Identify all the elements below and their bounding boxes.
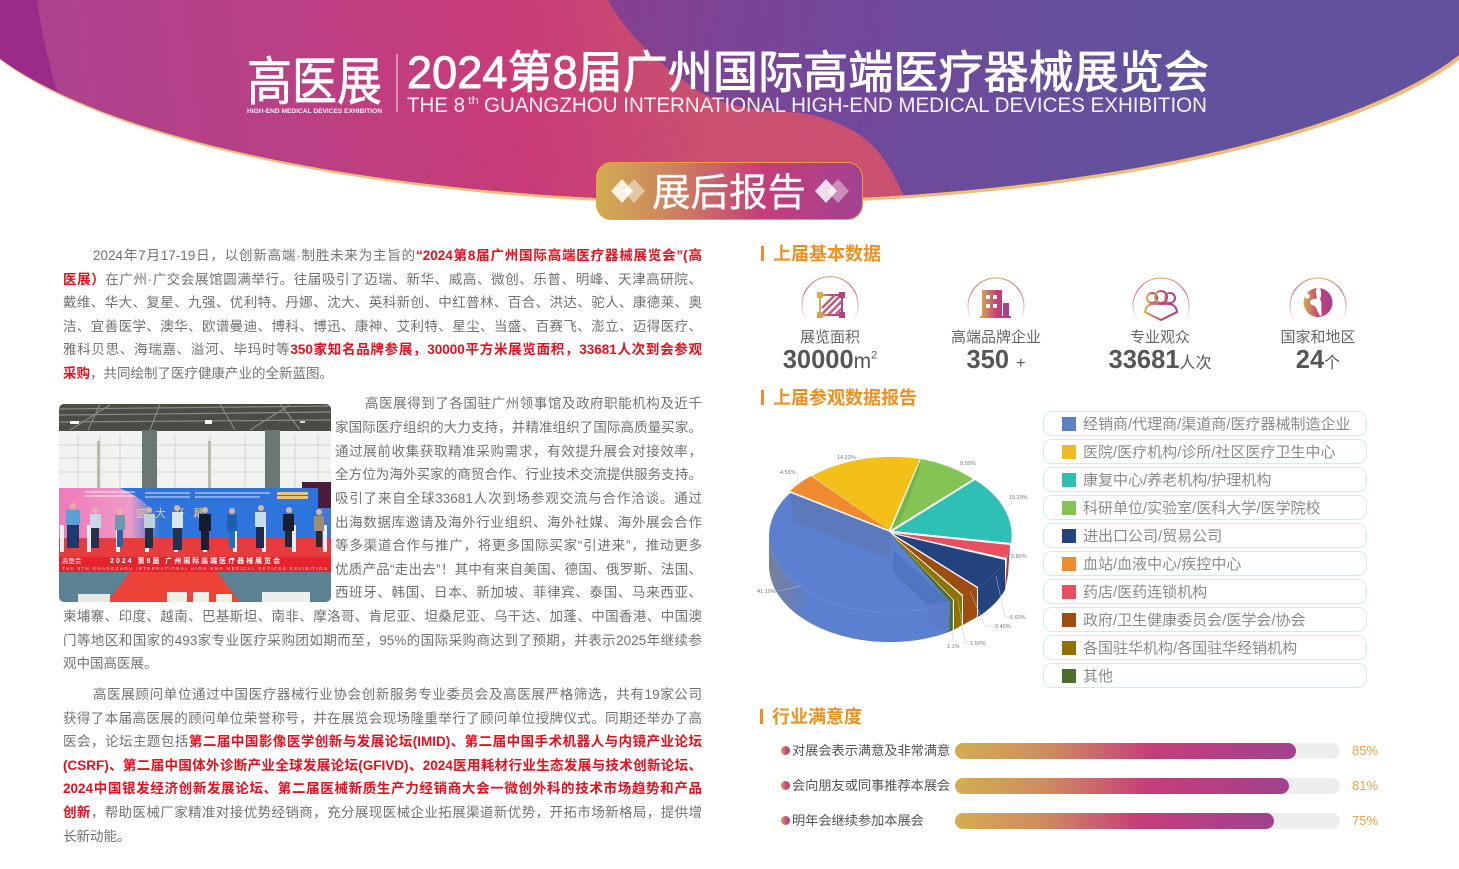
legend item: others: [1043, 663, 1367, 688]
data labels: [757, 455, 1028, 650]
legend item: rehab: [1043, 467, 1367, 492]
header banner: [0, 0, 1459, 220]
legend item: blood stations: [1043, 551, 1367, 576]
title: 2024第8届广州国际高端医疗器械展览会: [407, 47, 1209, 98]
legend item: rehab: 康复中心/养老机构/护理机构: [1083, 472, 1271, 489]
stat: exhibition area: 展览面积: [800, 329, 860, 346]
legend item: pharmacies: [1043, 579, 1367, 604]
legend item: trading: 进出口公司/贸易公司: [1083, 528, 1222, 545]
exhibition support paragraph: [63, 396, 702, 671]
stat: audience: [1109, 329, 1211, 374]
exhibition support paragraph: 通过展前收集获取精准采购需求，有效提升展会对接效率，: [335, 444, 702, 459]
forum paragraph: 医会，论坛主题包括第二届中国影像医学创新与发展论坛(IMID)、第二届中国手术机器人与内镜产业论坛: [63, 734, 702, 749]
data labels: 14.23%: [837, 455, 856, 461]
logo: HIGH-END MEDICAL DEVICES EXHIBITION: [247, 108, 383, 115]
forum paragraph: 长新动能。: [63, 829, 130, 844]
legend item: distributors: 经销商/代理商/渠道商/医疗器械制造企业: [1083, 416, 1351, 433]
exhibition support paragraph: 全方位为海外买家的商贸合作、行业技术交流提供服务支持。: [335, 467, 702, 482]
photo: opening ceremony: THE 8TH GUANGZHOU INTERNATIONAL HIGH-END MEDICAL DEVICES EXHIBITION: [62, 566, 327, 571]
stat: audience: 专业观众: [1130, 329, 1190, 346]
bar: recommend: 81%: [1352, 778, 1378, 793]
icon: brand enterprises: [968, 278, 1024, 322]
stat: brand enterprises: 350 +: [966, 346, 1025, 374]
legend item: hospitals: 医院/医疗机构/诊所/社区医疗卫生中心: [1083, 444, 1336, 461]
exhibition support paragraph: 高医展得到了各国驻广州领事馆及政府职能机构及近千: [365, 396, 702, 411]
english subtitle: THE 8: [407, 94, 465, 117]
data labels: 2.40%: [995, 624, 1011, 630]
photo: opening ceremony: 高医会: [62, 556, 82, 565]
data labels: 1.1%: [947, 644, 960, 650]
intro paragraph: 采购，共同绘制了医疗健康产业的全新蓝图。: [63, 366, 333, 381]
stat: countries: 24个: [1296, 346, 1340, 374]
intro paragraph: 洁、宜善医学、澳华、欧谱曼迪、博科、博迅、康神、艾利特、星尘、当盛、百赛飞、澎立、迈得医疗、: [63, 319, 702, 334]
olive slice: [891, 535, 962, 600]
english subtitle: GUANGZHOU INTERNATIONAL HIGH-END MEDICAL DEVICES EXHIBITION: [484, 94, 1207, 117]
bar: return next year: [781, 813, 1378, 829]
photo: opening ceremony: 盛大开幕: [136, 506, 212, 520]
intro paragraph: 医展）在广州·广交会展馆圆满举行。往届吸引了迈瑞、新华、威高、微创、乐普、明峰、天津高研院、: [63, 272, 702, 287]
intro paragraph: [63, 248, 702, 381]
bar: satisfied: 对展会表示满意及非常满意: [792, 743, 950, 758]
logo: 高医展: [247, 54, 382, 112]
green slice: [891, 459, 973, 530]
icon: exhibition area: [802, 277, 858, 322]
orange slice: [790, 476, 889, 530]
icon: professional audience: [1133, 278, 1189, 322]
legend item: hospitals: [1043, 439, 1367, 464]
photo: opening ceremony: [59, 404, 331, 602]
side walls: [769, 537, 950, 642]
gold rim of the header: [0, 0, 1459, 204]
teal slice: [893, 480, 1012, 543]
3D pie chart: [757, 455, 1028, 650]
data labels: 6.60%: [1010, 615, 1026, 621]
intro paragraph: 雅科贝思、海瑞嘉、溢河、毕玛时等350家知名品牌参展，30000平方米展览面积，33681人次到会参观: [63, 342, 702, 357]
report badge: 展后报告: [652, 172, 806, 215]
bar: recommend: [781, 778, 1378, 794]
legend item: trading: [1043, 523, 1367, 548]
forum paragraph: (CSRF)、第二届中国体外诊断产业全球发展论坛(GFIVD)、2024医用耗材行业生态发展与技术创新论坛、: [63, 758, 702, 773]
report badge: [596, 162, 862, 220]
exhibition support paragraph: 西班牙、韩国、日本、新加坡、菲律宾、泰国、马来西亚、: [335, 585, 702, 600]
bar: satisfied: [781, 743, 1378, 759]
exhibition support paragraph: 家国际医疗组织的大力支持，并精准组织了国际高质量买家。: [335, 420, 702, 435]
legend item: research: [1043, 495, 1367, 520]
forum paragraph: 获得了本届高医展的顾问单位荣誉称号，并在展览会现场隆重举行了顾问单位授牌仪式。同期还举办了高: [63, 711, 702, 726]
legend: [1043, 411, 1367, 688]
forum paragraph: 高医展顾问单位通过中国医疗器械行业协会创新服务专业委员会及高医展严格筛选，共有19家公司: [93, 687, 702, 702]
stat: exhibition area: 30000m2: [783, 346, 877, 374]
stat: brand enterprises: 高端品牌企业: [951, 329, 1041, 346]
intro paragraph: 2024年7月17-19日，以创新高端·制胜未来为主旨的“2024第8届广州国际高端医疗器械展览会”(高: [93, 248, 702, 263]
red slice: [893, 533, 1010, 558]
data labels: 1.50%: [970, 641, 986, 647]
heading: visitor data report: 上届参观数据报告: [773, 388, 917, 408]
data labels: 8.50%: [960, 461, 976, 467]
yellow slice: [812, 457, 920, 530]
stat: countries: [1280, 329, 1356, 374]
stat icons: [802, 276, 1346, 322]
exhibition support paragraph: 出海数据库邀请及海外行业组织、海外社媒、海外展会合作: [335, 515, 702, 530]
forum paragraph: 2024中国银发经济创新发展论坛、第二届医械新质生产力经销商大会一微创外科的技术市场趋势和产品: [63, 781, 702, 796]
blue slice: [769, 493, 950, 612]
stat: brand enterprises: [951, 329, 1041, 374]
exhibition support paragraph: 优质产品“走出去”！其中有来自美国、德国、俄罗斯、法国、: [335, 562, 702, 577]
photo: opening ceremony: 2024 第8届 广州国际高端医疗器械展览会: [110, 556, 280, 565]
bar: recommend: 会向朋友或同事推荐本展会: [792, 778, 950, 793]
stat: audience: 33681人次: [1109, 346, 1211, 374]
legend item: government: 政府/卫生健康委员会/医学会/协会: [1083, 612, 1306, 629]
heading: basic data: 上届基本数据: [773, 244, 881, 264]
data labels: 2.80%: [1011, 554, 1027, 560]
exhibition support paragraph: 观中国高医展。: [63, 656, 158, 671]
legend item: foreign agencies: [1043, 635, 1367, 660]
exhibition support paragraph: 等多渠道合作与推广，将更多国际买家“引进来”，推动更多: [335, 538, 702, 553]
legend item: pharmacies: 药店/医药连锁机构: [1083, 584, 1207, 601]
forum paragraph: [63, 687, 702, 844]
forum paragraph: 创新，帮助医械厂家精准对接优势经销商，充分展现医械企业拓展渠道新优势，开拓市场新格局，提供增: [63, 805, 702, 820]
stat: exhibition area: [783, 329, 877, 374]
data labels: 4.53%: [780, 470, 796, 476]
legend item: government: [1043, 607, 1367, 632]
legend item: others: 其他: [1083, 668, 1113, 685]
exhibition support paragraph: 门等地区和国家的493家专业医疗采购团如期而至，95%的国际采购商达到了预期，并表示2025年继续参: [63, 633, 702, 648]
data labels: 41.10%: [757, 589, 776, 595]
bar: return next year: 75%: [1352, 813, 1378, 828]
bar: return next year: 明年会继续参加本展会: [792, 813, 924, 828]
leader lines: [778, 457, 1013, 643]
legend item: blood stations: 血站/血液中心/疾控中心: [1083, 556, 1241, 573]
english subtitle: th: [468, 95, 479, 107]
dark green slice: [891, 535, 953, 602]
brown slice: [892, 535, 977, 595]
heading: satisfaction: 行业满意度: [772, 707, 862, 727]
satisfaction bars: [781, 743, 1378, 829]
legend item: distributors: [1043, 411, 1367, 436]
intro paragraph: 戴维、华大、复星、九强、优利特、丹娜、沈大、英科新创、中红普林、百合、洪达、驼人、康德莱、奥: [63, 295, 702, 310]
navy slice: [893, 534, 1005, 587]
data labels: 15.20%: [1009, 495, 1028, 501]
bar: satisfied: 85%: [1352, 743, 1378, 758]
legend item: foreign agencies: 各国驻华机构/各国驻华经销机构: [1083, 640, 1297, 657]
stat: countries: 国家和地区: [1280, 329, 1356, 346]
icon: countries and regions: [1290, 278, 1346, 322]
exhibition support paragraph: 柬埔寨、印度、越南、巴基斯坦、南非、摩洛哥、肯尼亚、坦桑尼亚、乌干达、加蓬、中国香港、中国澳: [63, 609, 702, 624]
exhibition support paragraph: 吸引了来自全球33681人次到场参观交流与合作洽谈。通过: [335, 491, 702, 506]
legend item: research: 科研单位/实验室/医科大学/医学院校: [1083, 500, 1321, 517]
